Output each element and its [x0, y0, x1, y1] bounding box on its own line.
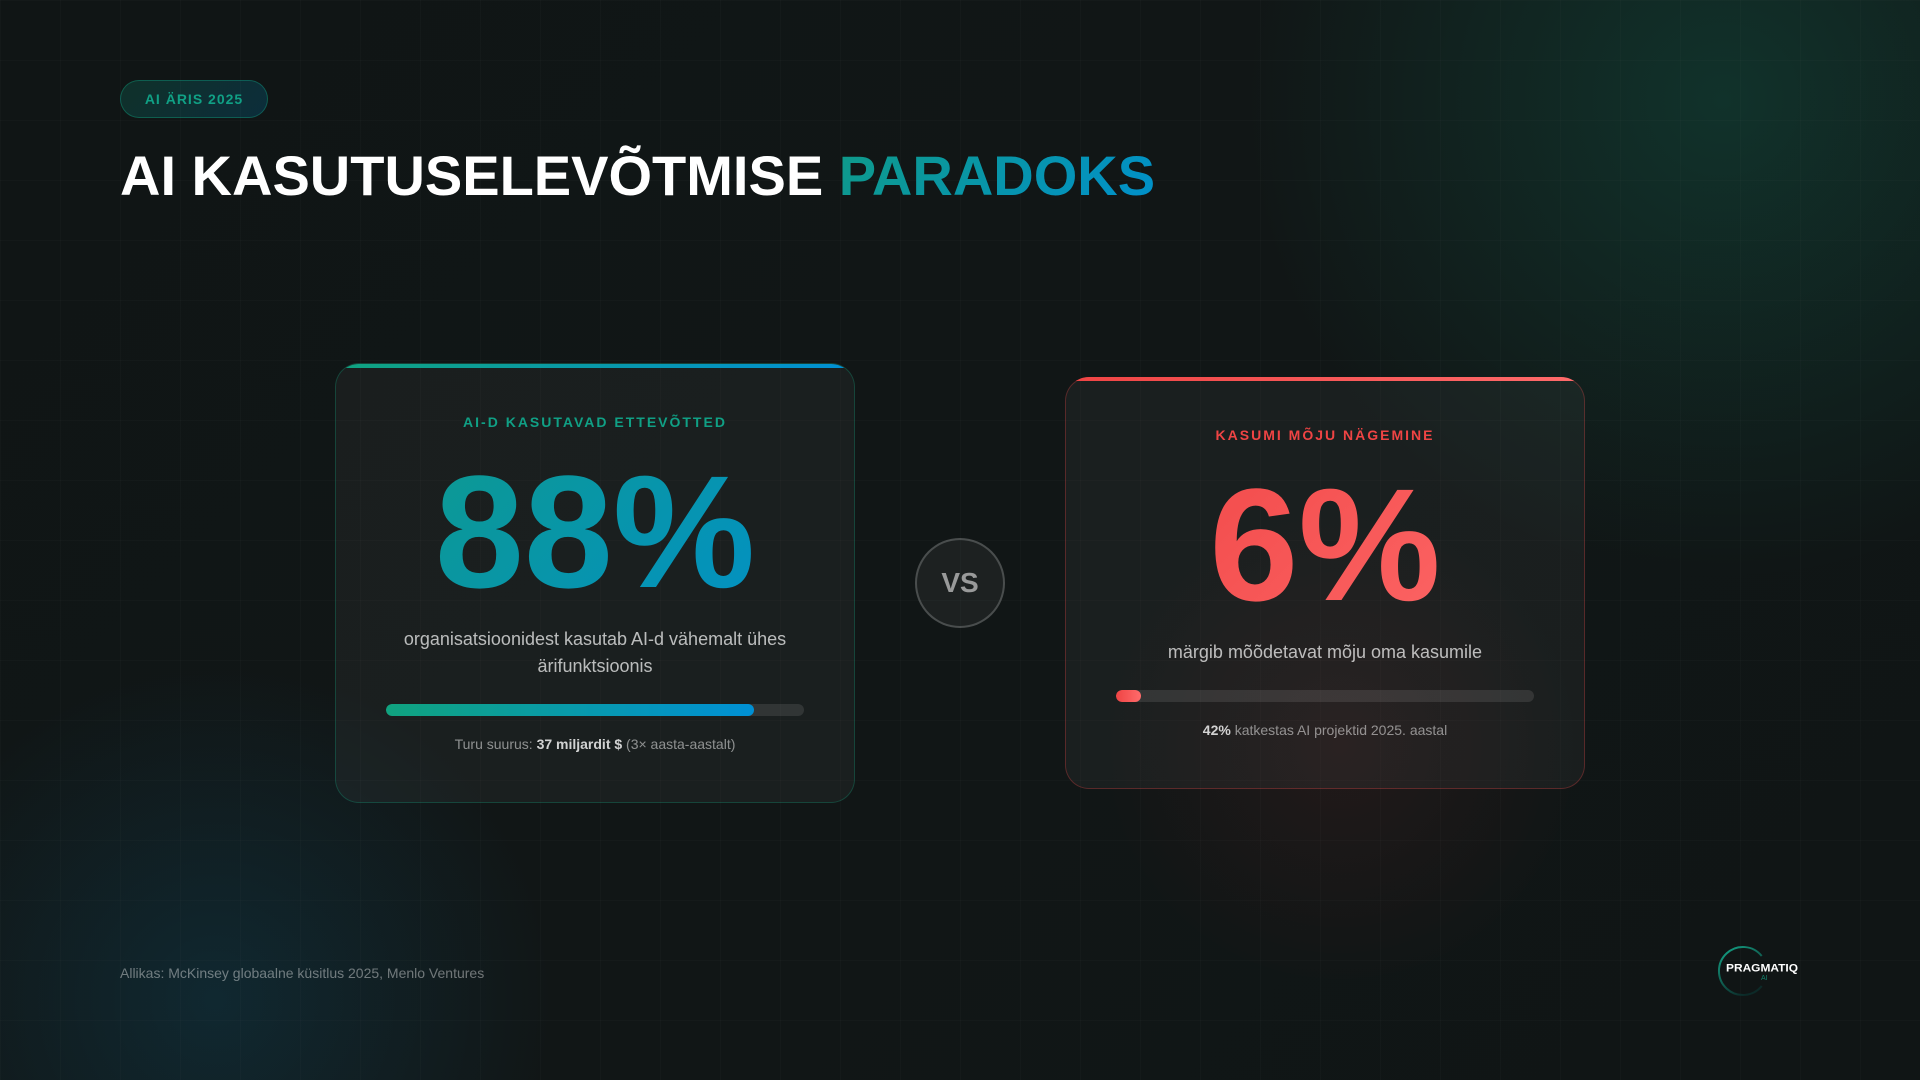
badge: AI äris 2025: AI ÄRIS 2025 [145, 91, 243, 107]
VS circle: VS [941, 567, 979, 598]
big number: 6%: 6% [1209, 455, 1441, 634]
logo: Pragmatiq AI [1718, 946, 1798, 996]
panel: profit impact card [1065, 376, 1585, 789]
note: market size: Turu suurus: 37 miljardit $ (3× aasta-aastalt) [455, 736, 735, 752]
big number: 6% [1066, 465, 1584, 625]
card accent strip [1076, 377, 1574, 381]
panel: AI adoption card [335, 362, 855, 803]
badge: AI äris 2025 [120, 80, 268, 118]
logo: Pragmatiq AI: AI [1761, 975, 1768, 982]
big number: 88%: 88% [435, 442, 755, 621]
description: organisatsioonidest kasutab AI-d vähemalt ühes ärifunktsioonis [404, 629, 786, 676]
card accent strip [346, 364, 844, 368]
description: märgib mõõdetavat mõju oma kasumile [1168, 642, 1482, 662]
card label: AI-D KASUTAVAD ETTEVÕTTED [463, 414, 727, 430]
big number: 88% [336, 452, 854, 612]
title: AI KASUTUSELEVÕTMISE PARADOKS [120, 144, 1155, 207]
logo: Pragmatiq AI: PRAGMATIQ [1726, 962, 1798, 974]
progress bar: 6% [1116, 690, 1534, 702]
progress bar: 88% [386, 704, 804, 716]
card label: KASUMI MÕJU NÄGEMINE [1216, 427, 1434, 443]
source: Allikas: McKinsey globaalne küsitlus 2025, Menlo Ventures [120, 965, 484, 981]
VS circle [915, 538, 1005, 628]
note: cancelled projects: 42% katkestas AI projektid 2025. aastal [1203, 722, 1447, 738]
